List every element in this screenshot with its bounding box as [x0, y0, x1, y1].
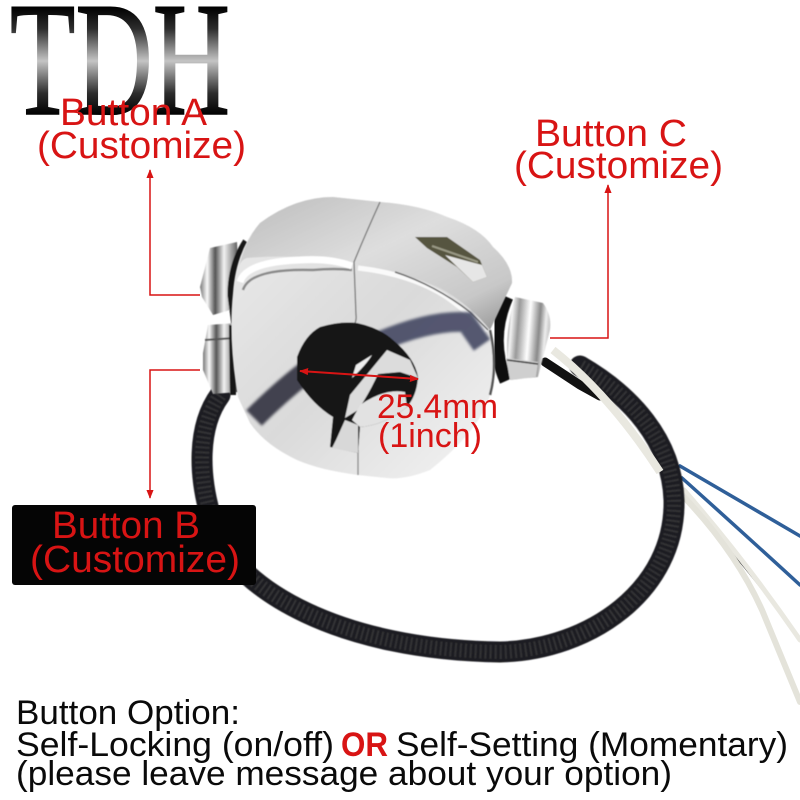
arrow: Button A: [150, 170, 200, 295]
arrow: bore diameter: [300, 371, 418, 379]
button A: [200, 242, 247, 325]
button option note: [16, 694, 788, 793]
black braided cable loop: [202, 366, 674, 652]
label: bore diameter: (1inch): [378, 417, 482, 455]
button C: [497, 297, 550, 381]
button B: [203, 323, 238, 395]
arrow: Button C: [550, 185, 608, 338]
label: Button A: (Customize): [37, 125, 246, 167]
button option note: Self-Locking (on/off): [16, 726, 334, 764]
split seam: [350, 202, 380, 328]
label box: Button B: (Customize): [30, 539, 240, 581]
label: Button A: Button A: [60, 92, 208, 134]
white wire and black wedge from button C: [545, 350, 660, 472]
slot window: [415, 237, 487, 282]
switch housing: [200, 197, 550, 478]
label: Button C: (Customize): [514, 145, 723, 187]
housing body: [231, 197, 512, 478]
button option note: OR: [341, 726, 388, 764]
label: Button C: Button C: [535, 113, 687, 155]
reflected braid on face: [254, 322, 482, 418]
top surface: [238, 197, 512, 330]
bore interior chrome: [345, 350, 418, 418]
handlebar bore: [297, 322, 418, 453]
arrow: Button B: [150, 370, 200, 498]
label: Button C: [514, 113, 723, 187]
label box: Button B: [12, 505, 256, 585]
chrome ridge highlight: [243, 269, 352, 290]
button option note: Self-Setting (Momentary): [396, 726, 788, 764]
label: bore diameter: 25.4mm: [377, 388, 498, 426]
label: bore diameter: [377, 388, 498, 455]
right edge shading: [490, 330, 494, 395]
button option note: (please leave message about your option): [16, 755, 672, 793]
loose wires: [680, 466, 800, 702]
button option note: Button Option:: [16, 694, 240, 732]
label: Button A: [37, 92, 246, 167]
label box: Button B: Button B: [52, 505, 200, 547]
